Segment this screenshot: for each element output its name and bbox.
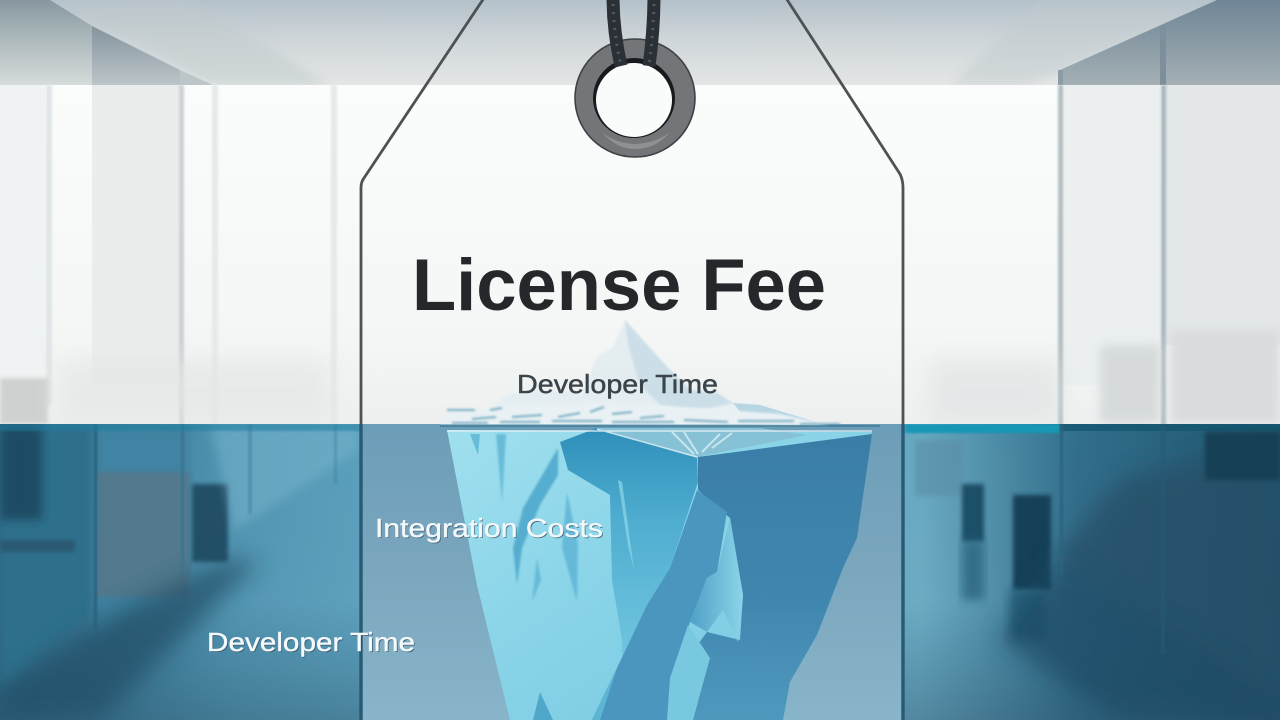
panel: hanging price tag body below the waterline (362, 424, 902, 720)
heading: License Fee: License Fee (412, 245, 826, 326)
iceberg (440, 320, 880, 720)
label: Developer Time below the waterline: Developer Time (208, 628, 416, 658)
tag outline (361, 0, 903, 720)
icon: metal ring eyelet (575, 39, 695, 157)
icon: cord through ring (613, 0, 654, 66)
label: Integration Costs: Integration Costs (376, 514, 604, 544)
background: office reflected under water (0, 424, 1280, 720)
iceberg: submerged mass (447, 428, 872, 720)
label: Developer Time below the waterline: Developer Time (207, 627, 415, 657)
label: Integration Costs: Integration Costs (375, 513, 603, 543)
label: Developer Time above the waterline: Developer Time (517, 369, 718, 399)
iceberg: tip above water (440, 320, 880, 426)
background: office above the waterline (0, 0, 1280, 425)
